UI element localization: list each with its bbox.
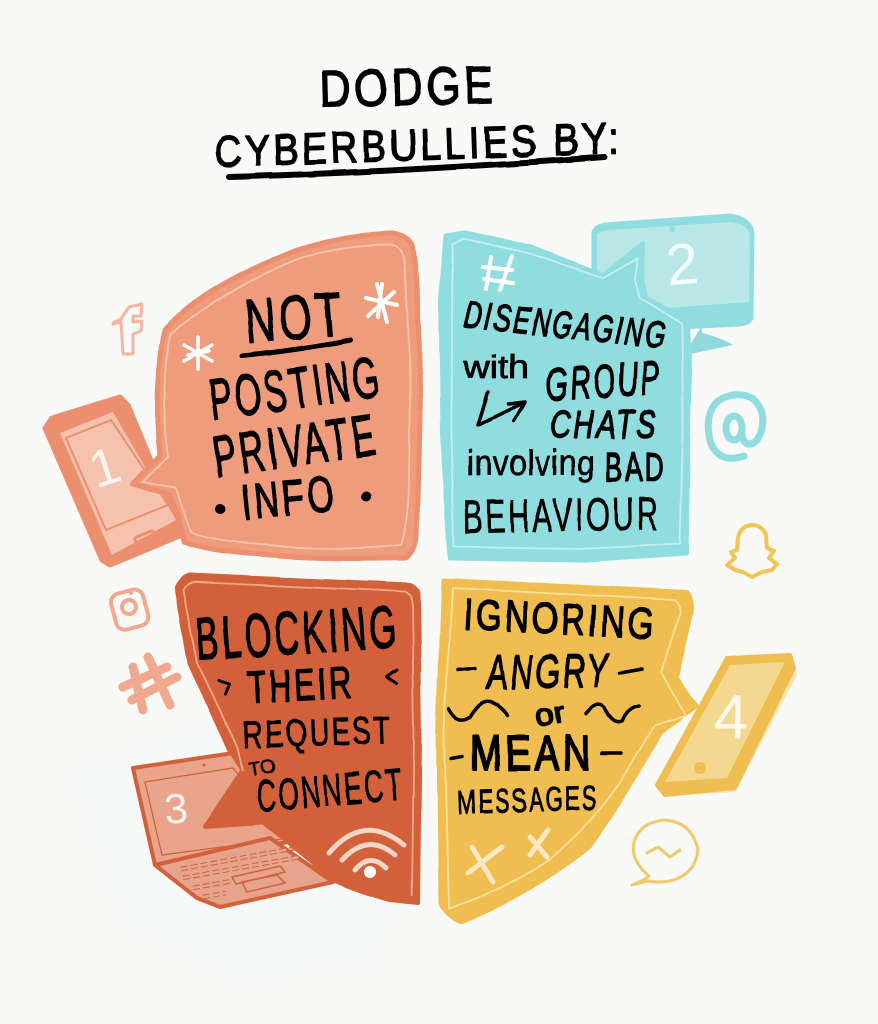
panel 4: ignoring angry or mean messages: [438, 580, 797, 922]
title line: Cyberbullies by: CYBERBULLIES BY:: [214, 114, 623, 177]
speech bubble 1: [133, 233, 420, 559]
text block: Disengaging with group chats involving bad behaviour: [462, 294, 669, 543]
text block: Blocking their request to connect: CONNECT: [254, 758, 406, 822]
text block: Disengaging with group chats involving bad behaviour: BEHAVIOUR: [462, 487, 661, 543]
icon: smartphone 4: [657, 655, 797, 796]
text block: Ignoring angry or mean messages: MEAN: [470, 725, 594, 781]
speech bubble 4: [438, 580, 697, 922]
number 4: 4: [714, 683, 748, 752]
panel 3: blocking their request to connect: [109, 575, 420, 907]
text block: Disengaging with group chats involving bad behaviour: BAD: [605, 444, 666, 490]
title: [214, 56, 623, 177]
text block: Disengaging with group chats involving bad behaviour: with: [462, 349, 529, 385]
icon: hashtag: [123, 657, 177, 710]
icon: smartphone 1: [45, 397, 182, 565]
speech bubble 2: [440, 232, 690, 560]
panel 1: not posting private info: [45, 233, 420, 565]
text block: Ignoring angry or mean messages: ANGRY: [484, 645, 611, 700]
text block: Not posting private info: [205, 279, 386, 531]
icon: instagram: [109, 587, 150, 632]
icon: facebook f: [113, 304, 142, 354]
text block: Ignoring angry or mean messages: IGNORING: [462, 590, 658, 649]
hashtag white: [483, 256, 513, 290]
title line: Dodge: DODGE: [319, 56, 497, 119]
icon: messenger: [632, 820, 698, 885]
title underline: [229, 157, 605, 177]
text block: Blocking their request to connect: [194, 593, 406, 822]
sparkle large: [366, 284, 397, 322]
number 3: 3: [163, 784, 189, 833]
text block: Not posting private info: PRIVATE: [209, 402, 382, 490]
text block: Disengaging with group chats involving bad behaviour: DISENGAGING: [462, 294, 669, 357]
icon: desktop monitor 2: [593, 215, 753, 354]
text block: Not posting private info: POSTING: [205, 344, 386, 433]
text block: Blocking their request to connect: REQUEST: [242, 710, 393, 757]
speech bubble 3: [177, 575, 420, 903]
icon: snapchat ghost: [727, 525, 777, 577]
number 1: 1: [82, 436, 127, 500]
text block: Blocking their request to connect: BLOCKING: [194, 593, 401, 673]
icon: laptop 3: [133, 752, 333, 907]
text block: Disengaging with group chats involving bad behaviour: GROUP: [544, 350, 663, 411]
text block: Not posting private info: INFO: [238, 465, 340, 531]
icon: wifi: [329, 830, 404, 878]
text block: Ignoring angry or mean messages: or: [533, 696, 567, 733]
squiggles: [449, 702, 639, 722]
text block: Disengaging with group chats involving bad behaviour: involving: [467, 442, 595, 483]
text block: Disengaging with group chats involving bad behaviour: CHATS: [550, 403, 658, 447]
icon: at sign: [708, 395, 763, 458]
text block: Ignoring angry or mean messages: MESSAGES: [457, 779, 599, 822]
sparkle small: [184, 337, 212, 369]
panel 2: disengaging with group chats: [440, 215, 777, 577]
number 2: 2: [663, 231, 701, 298]
text block: Blocking their request to connect: THEIR: [246, 656, 355, 713]
text block: Ignoring angry or mean messages: [449, 590, 658, 822]
crosses: [468, 830, 548, 882]
text block: Not posting private info: NOT: [242, 279, 348, 357]
arrow: [478, 392, 525, 425]
text block: Blocking their request to connect: TO: [248, 756, 277, 781]
